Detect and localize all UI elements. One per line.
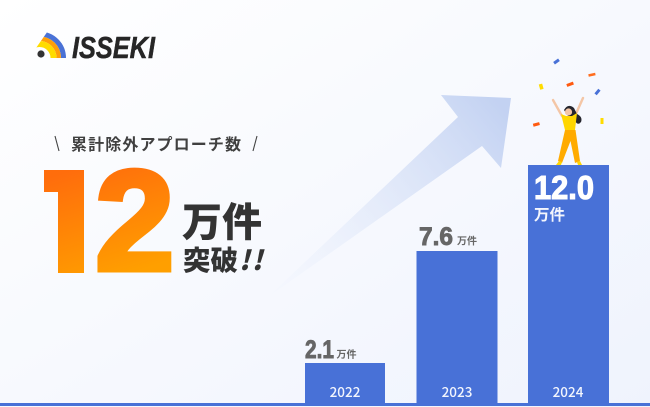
icon: celebrating person — [553, 98, 583, 165]
bar 2022: 2022 — [330, 381, 361, 401]
head — [565, 108, 572, 116]
feet — [556, 161, 582, 165]
hair — [564, 106, 582, 124]
arms — [553, 98, 583, 116]
value 12.0 万件: 12.0 — [534, 169, 594, 206]
growth arrow — [268, 95, 511, 297]
decorative slash left — [55, 136, 59, 151]
value 2.1 万件: 万件 — [336, 346, 356, 361]
icon: rainbow arc — [36, 32, 66, 58]
value 2.1 万件 — [305, 336, 356, 364]
value 7.6 万件: 万件 — [457, 232, 477, 248]
decorative slash right — [253, 136, 257, 151]
value 7.6 万件 — [419, 223, 477, 251]
big number 12: 2 — [95, 142, 175, 301]
bar chart — [305, 165, 609, 404]
logo: ISSEKI — [36, 32, 156, 58]
big number 12: 1 — [26, 142, 108, 307]
value 7.6 万件: 7.6 — [419, 223, 453, 251]
legs — [558, 130, 580, 163]
bar 2024 — [528, 165, 609, 404]
value 2.1 万件: 2.1 — [305, 336, 334, 364]
value 12.0 万件: 万件 — [534, 203, 565, 225]
bar 2023: 2023 — [442, 381, 472, 401]
value 12.0 万件 — [534, 169, 594, 225]
text 突破!!: 突破!! — [183, 238, 265, 278]
bar 2024: 2024 — [553, 381, 584, 401]
big number 12 — [44, 168, 172, 273]
bar 2023 — [416, 251, 498, 404]
confetti — [533, 59, 604, 127]
unit text 万件: 万件 — [182, 190, 262, 248]
torso — [561, 113, 577, 130]
baseline — [0, 403, 650, 406]
bar 2022 — [305, 363, 385, 404]
subheading: 累計除外アプローチ数 — [71, 131, 241, 155]
logo wordmark: ISSEKI — [72, 30, 156, 65]
